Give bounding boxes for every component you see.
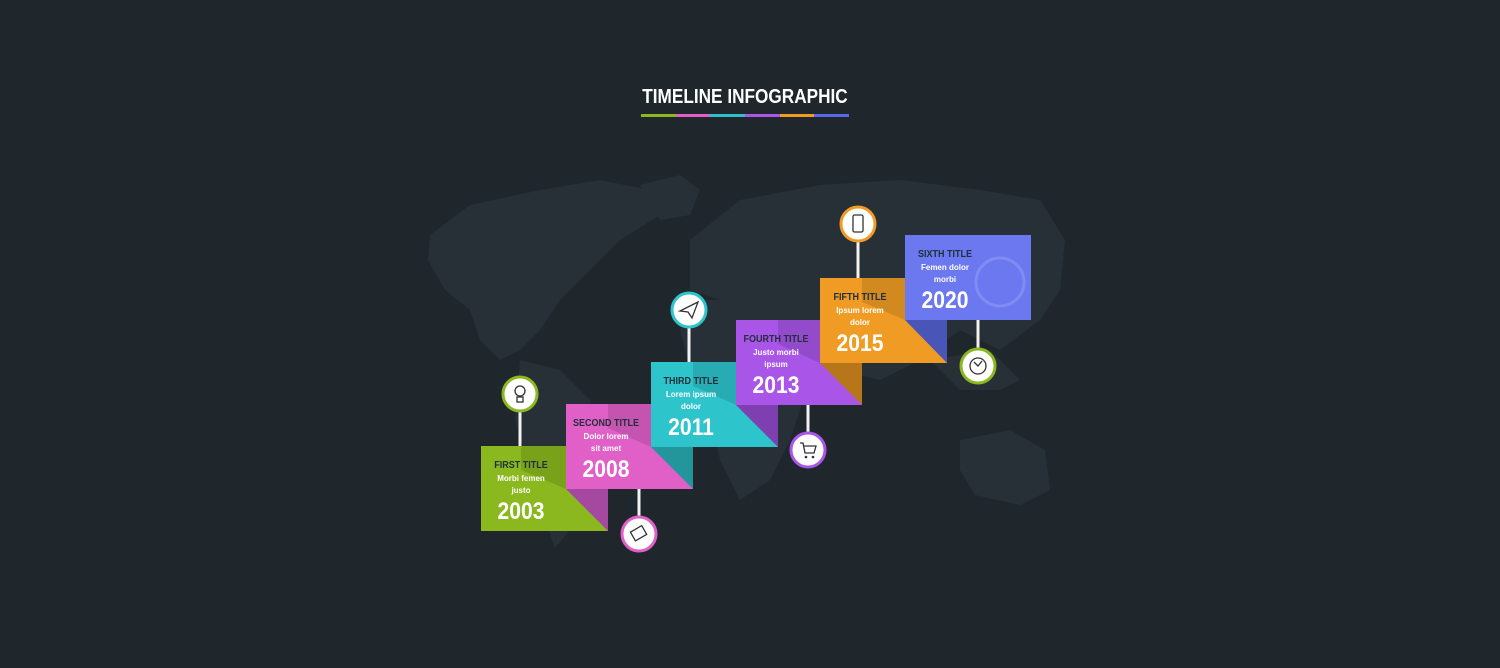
- step 6: 2020: SIXTH TITLE: [918, 249, 972, 260]
- icon: cart: [791, 433, 825, 467]
- icon: money: [622, 517, 656, 551]
- title underline: [641, 114, 849, 117]
- step 2: 2008: [566, 404, 693, 489]
- step 5: 2015: Ipsum lorem: [836, 306, 884, 315]
- step 4: 2013: Justo morbi: [753, 348, 799, 357]
- step 1: 2003: justo: [510, 486, 531, 495]
- step 1: 2003: [481, 446, 608, 531]
- step 4: 2013: 2013: [753, 372, 799, 398]
- step 3: 2011: [651, 362, 778, 447]
- step 5: 2015: dolor: [850, 318, 870, 327]
- step 4: 2013: ipsum: [764, 360, 788, 369]
- step 6: 2020: morbi: [934, 275, 956, 284]
- world map silhouette: [428, 175, 1065, 548]
- step 2: 2008: SECOND TITLE: [573, 418, 639, 429]
- step 5: 2015: FIFTH TITLE: [834, 292, 886, 303]
- step 2: 2008: 2008: [583, 456, 629, 482]
- step 3: 2011: Lorem ipsum: [666, 390, 716, 399]
- icon: paper plane: [672, 293, 706, 327]
- step 3: 2011: dolor: [681, 402, 701, 411]
- title: TIMELINE INFOGRAPHIC: [642, 86, 848, 108]
- step 1: 2003: 2003: [498, 498, 544, 524]
- step 1: 2003: Morbi femen: [497, 474, 545, 483]
- step 6: 2020: 2020: [922, 287, 968, 313]
- step 3: 2011: THIRD TITLE: [664, 376, 718, 387]
- step 4: 2013: FOURTH TITLE: [744, 334, 808, 345]
- icon: clock: [961, 349, 995, 383]
- step 3: 2011: 2011: [668, 414, 714, 440]
- step 5: 2015: 2015: [837, 330, 883, 356]
- step 1: 2003: FIRST TITLE: [494, 460, 548, 471]
- icon: phone: [841, 207, 875, 241]
- step 4: 2013: [736, 320, 862, 405]
- connectors: [520, 240, 978, 517]
- step 6: 2020: Femen dolor: [921, 263, 969, 272]
- step 2: 2008: sit amet: [591, 444, 621, 453]
- icon: lightbulb: [503, 377, 537, 411]
- step 2: 2008: Dolor lorem: [584, 432, 628, 441]
- step 5: 2015: [820, 278, 947, 363]
- step 6: 2020: [905, 235, 1031, 320]
